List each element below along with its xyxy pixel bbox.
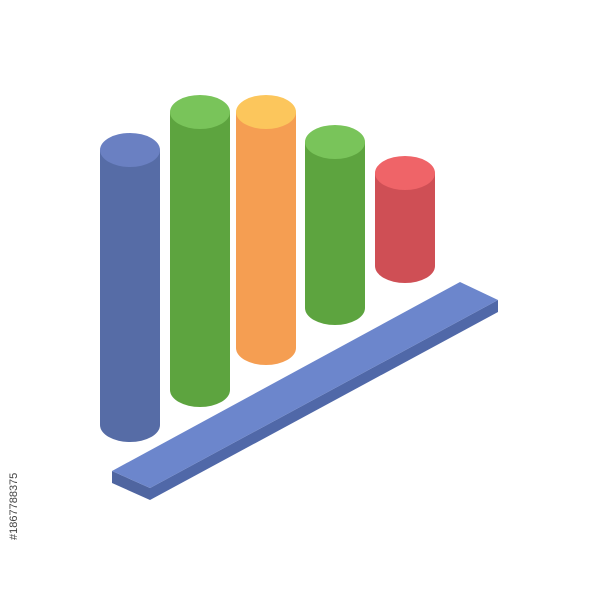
- base bar: [112, 282, 498, 500]
- cylinder: orange: [236, 95, 296, 365]
- cylinder: blue: [100, 133, 160, 442]
- cylinder: green tall: [170, 95, 230, 407]
- watermark text: #1867788375: [8, 473, 20, 540]
- cylinder: red: [375, 156, 435, 283]
- cylinder: green short: [305, 125, 365, 325]
